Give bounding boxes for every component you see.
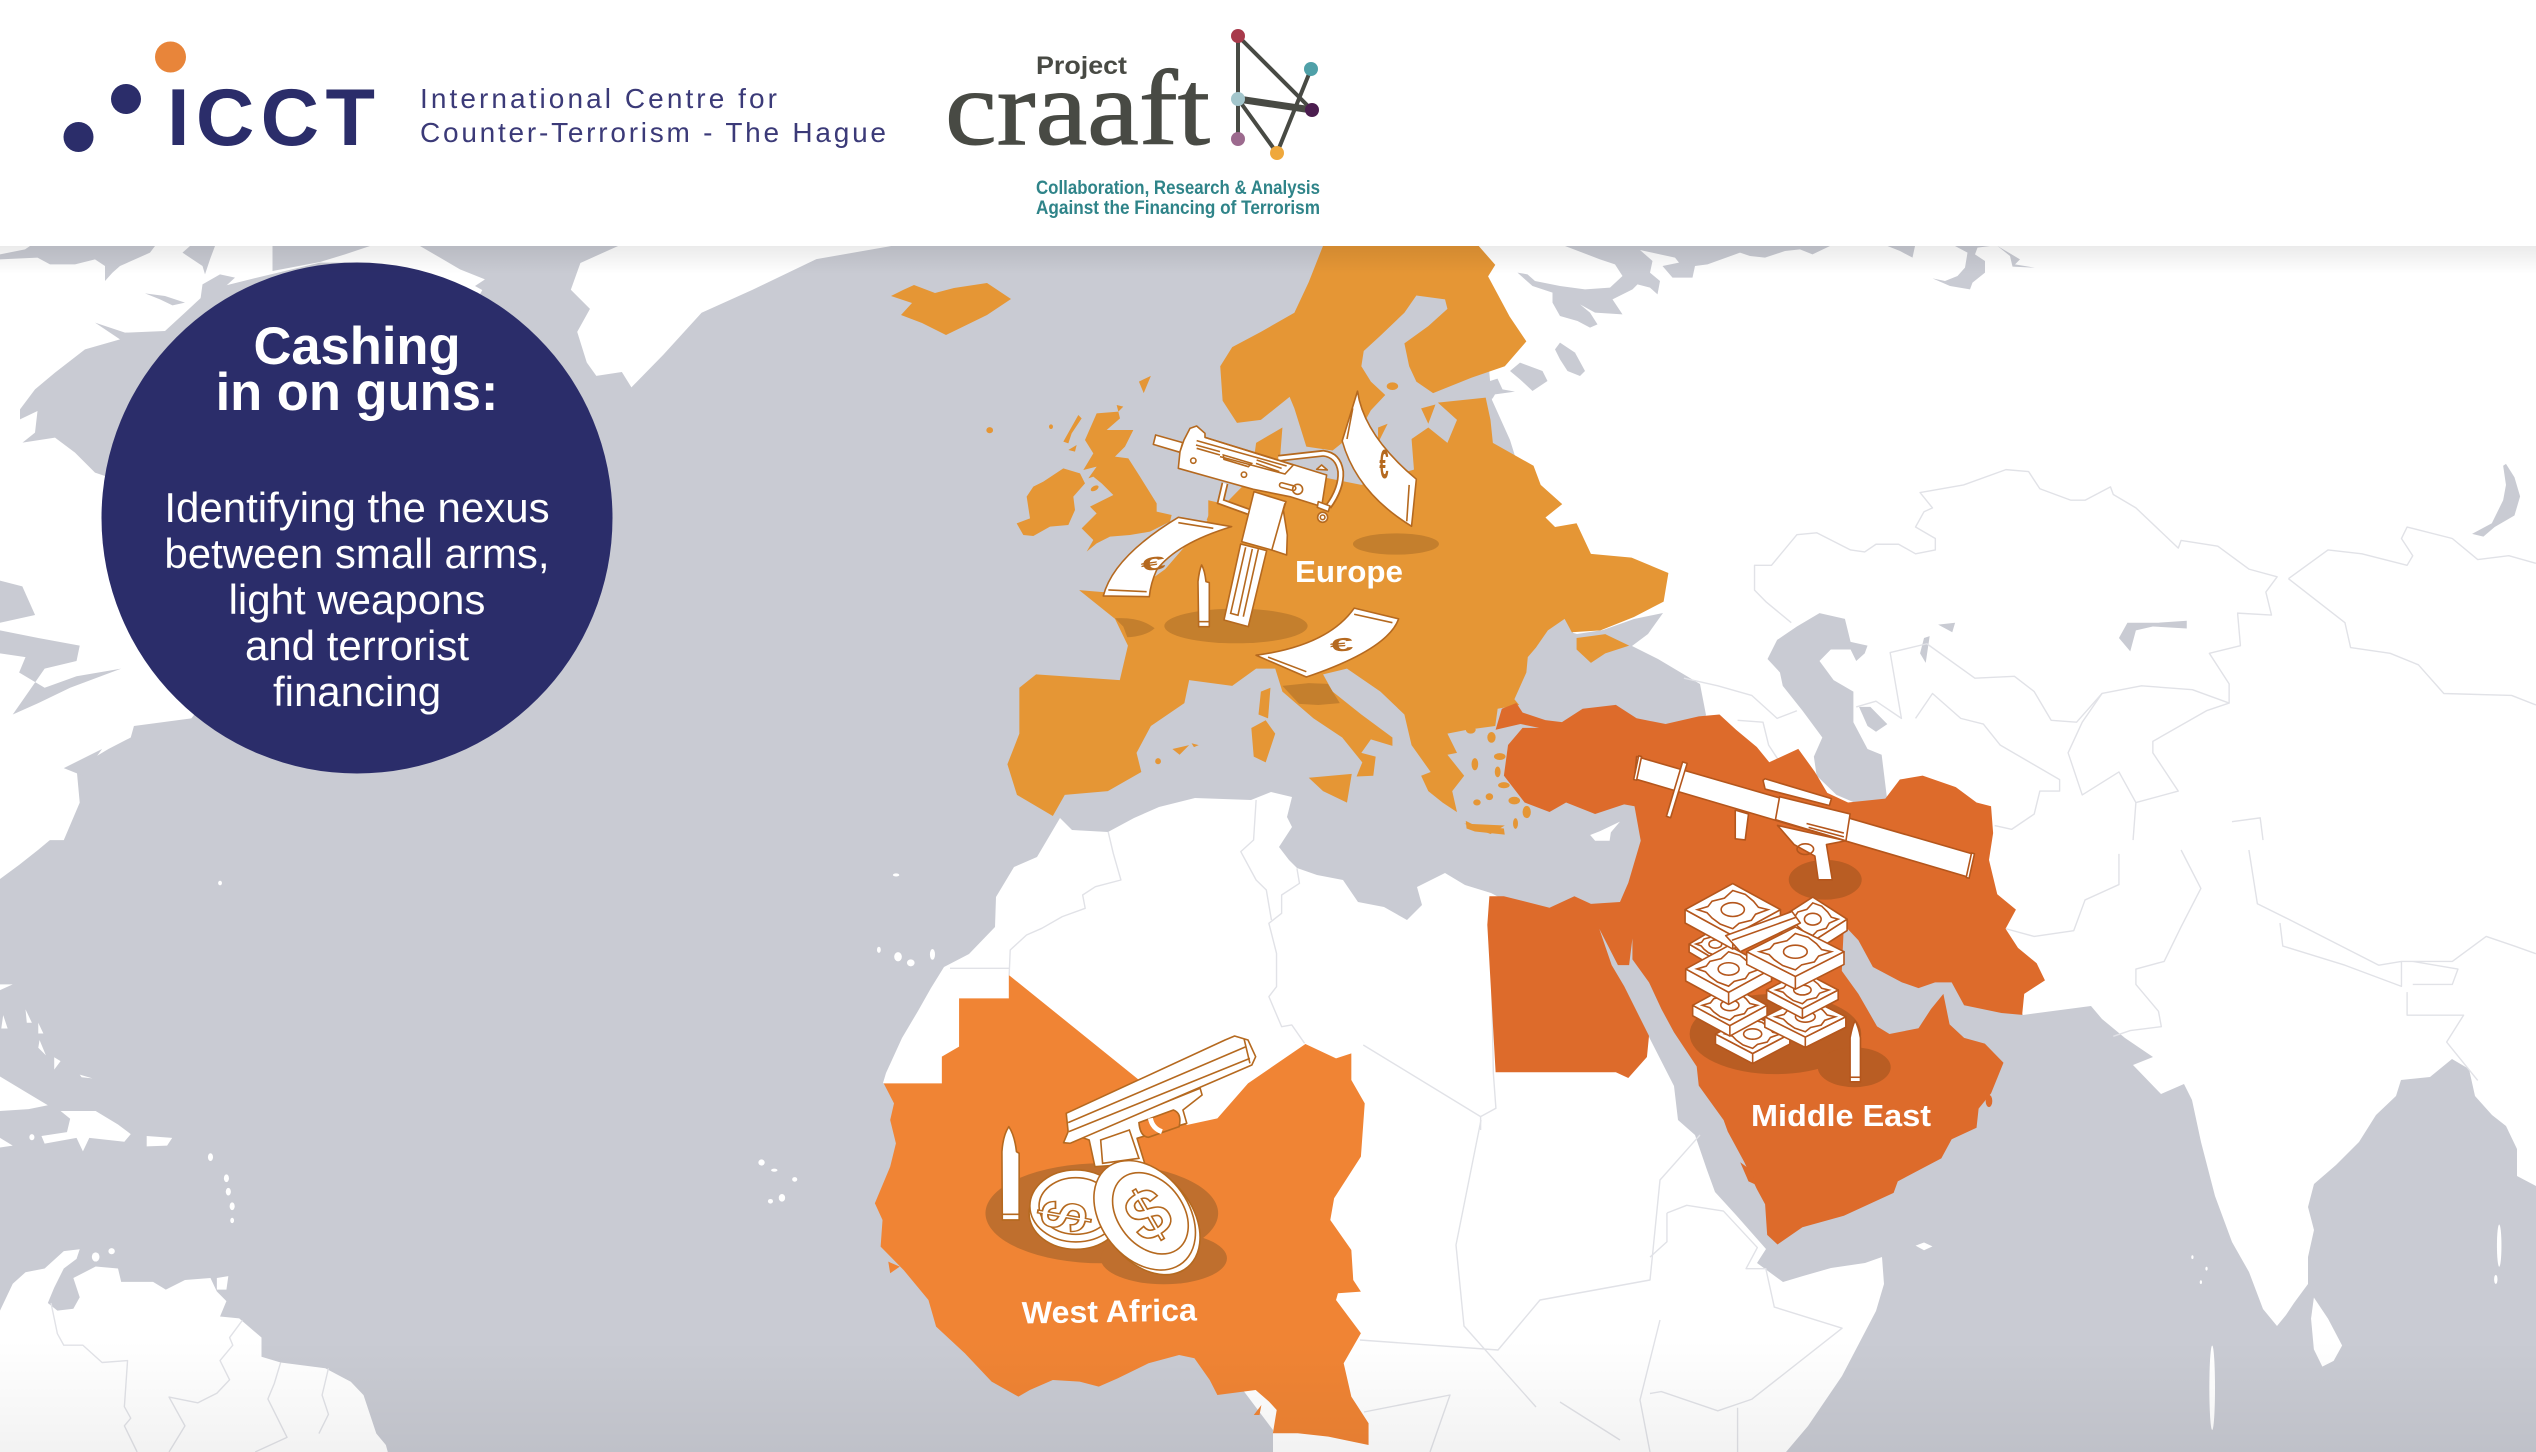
- header band: [0, 0, 2536, 246]
- text block: ICCT full name: International Centre for: [420, 83, 777, 114]
- text block: subtitle: light weapons: [229, 576, 485, 623]
- Cyprus: [1590, 822, 1620, 841]
- euro symbol on lower note: €: [1329, 634, 1354, 656]
- icon: left banknote: [1103, 517, 1232, 597]
- region: West Africa: [875, 975, 1369, 1445]
- Africa: [883, 792, 1884, 1452]
- icon: Italy shadow: [1282, 683, 1340, 705]
- logo: Project CRAAFT: Project: [1036, 52, 1128, 80]
- heading: Cashing in on guns: in on guns:: [216, 363, 498, 422]
- icon: top banknote: [1342, 391, 1416, 526]
- dollar sign on flat coin: $: [1025, 1195, 1103, 1237]
- icon: lower banknote: [1256, 608, 1399, 677]
- Canary and Cape Verde islands: [218, 873, 935, 1204]
- icon: bullet: [1198, 565, 1209, 627]
- icon: stacks of banknotes: [1685, 884, 1847, 1064]
- icon: bullet: [1002, 1127, 1019, 1220]
- panel: title circle: [102, 262, 612, 774]
- Hudson Strait, Labrador Sea and Gulf of St Lawrence: [0, 246, 660, 479]
- icon: Europe shadows: [1115, 533, 1439, 643]
- region: Middle East: [1487, 703, 2045, 1244]
- heading: Cashing in on guns: [216, 317, 498, 422]
- euro symbol on top note: €: [1379, 441, 1389, 487]
- text block: subtitle: financing: [273, 668, 441, 715]
- dollar sign on upright coin: $: [1112, 1171, 1184, 1258]
- icon: submachine gun: [1153, 426, 1341, 627]
- text block: subtitle: [164, 484, 550, 715]
- map: country borders: [51, 470, 2536, 1452]
- logo: ICCT: ICCT: [167, 73, 375, 163]
- logo: ICCT: [64, 42, 886, 163]
- Eurasia: [1478, 246, 2536, 1326]
- text block: subtitle: and terrorist: [245, 622, 469, 669]
- icon group: West Africa pistol, coins and bullet: [985, 1036, 1256, 1290]
- text block: subtitle: between small arms,: [164, 530, 550, 577]
- region: Greek islands: [1466, 726, 1531, 835]
- label: West Africa: West Africa: [1022, 1292, 1198, 1331]
- text block: CRAAFT strapline: Against the Financing of Terrorism: [1036, 198, 1320, 219]
- text block: ICCT full name: [420, 83, 886, 148]
- Greenland: [571, 246, 893, 387]
- icon: bullet: [1850, 1021, 1860, 1082]
- icon group: Europe gun, bullet and banknotes: [1103, 391, 1439, 705]
- icon group: Middle East launcher, cash and bullet: [1634, 756, 1974, 1087]
- Indian Ocean islands: [1916, 1224, 2501, 1430]
- North America: [0, 246, 485, 840]
- text block: ICCT full name: Counter-Terrorism - The Hague: [420, 117, 886, 148]
- icon: pistol: [1064, 1036, 1256, 1167]
- text block: subtitle: Identifying the nexus: [164, 484, 550, 531]
- euro symbol on left note: €: [1139, 552, 1167, 576]
- label: Middle East: Middle East: [1751, 1098, 1931, 1133]
- South America and Caribbean: [0, 984, 388, 1452]
- logo: Project CRAAFT: craaft: [945, 50, 1210, 168]
- region: British Isles: [1017, 405, 1223, 563]
- region: Iceland: [891, 283, 1011, 335]
- Arctic seas, White Sea, Ladoga, Onega and Gulf of Finland: [1440, 246, 2035, 401]
- logo: Project CRAAFT: [945, 29, 1320, 219]
- map: inland seas and lakes: [1440, 246, 2520, 804]
- icon: coins: [1029, 1145, 1221, 1290]
- text block: CRAAFT strapline: Collaboration, Research & Analysis: [1036, 178, 1320, 199]
- icon: rocket launcher: [1634, 756, 1974, 880]
- icon: Middle East shadows: [1690, 860, 1891, 1087]
- heading: Cashing in on guns: Cashing: [253, 317, 461, 376]
- text block: CRAAFT strapline: [1036, 178, 1320, 219]
- icon: West Africa shadows: [985, 1163, 1227, 1284]
- icon: network nodes: [1231, 29, 1319, 160]
- region: Europe: [986, 246, 1668, 834]
- label: Europe: Europe: [1295, 554, 1403, 589]
